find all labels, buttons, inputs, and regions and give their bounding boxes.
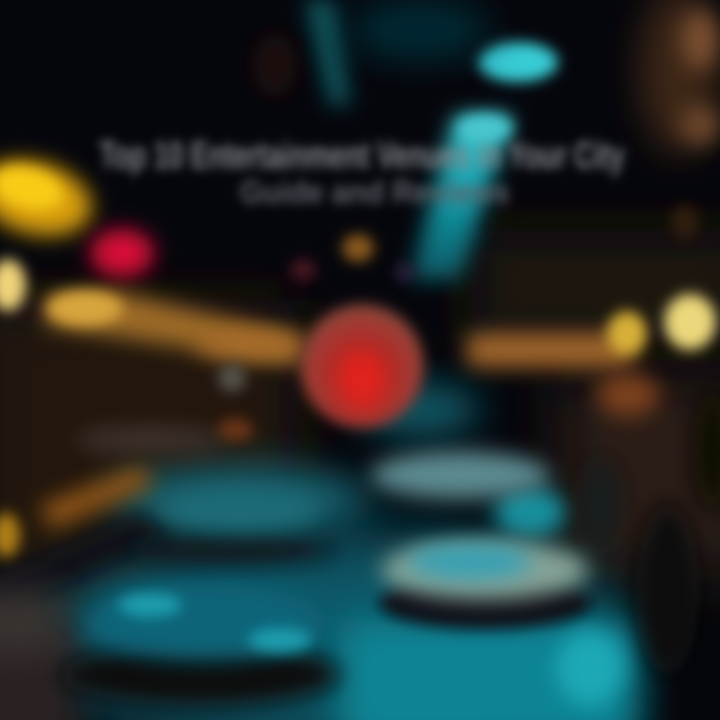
small lights bbox=[290, 204, 699, 281]
lower left warm lights bbox=[0, 364, 253, 557]
lower left dark corner and diagonal band bbox=[0, 515, 170, 720]
icon: red circular play badge bbox=[300, 304, 424, 428]
warm light band left bbox=[0, 259, 305, 365]
subtitle text, blurred: Guide and Reviews bbox=[240, 174, 510, 210]
yellow lamp left bbox=[0, 148, 100, 248]
table: right lower bbox=[370, 451, 591, 629]
right dark pillars bbox=[580, 390, 720, 675]
top right warm decoration bbox=[253, 0, 720, 155]
warm light band right bbox=[465, 294, 716, 417]
upper teal light beams bbox=[305, 0, 558, 280]
red lamp bbox=[90, 229, 154, 277]
table: left lower bbox=[60, 490, 340, 707]
floor: teal lower scene bbox=[30, 384, 640, 720]
